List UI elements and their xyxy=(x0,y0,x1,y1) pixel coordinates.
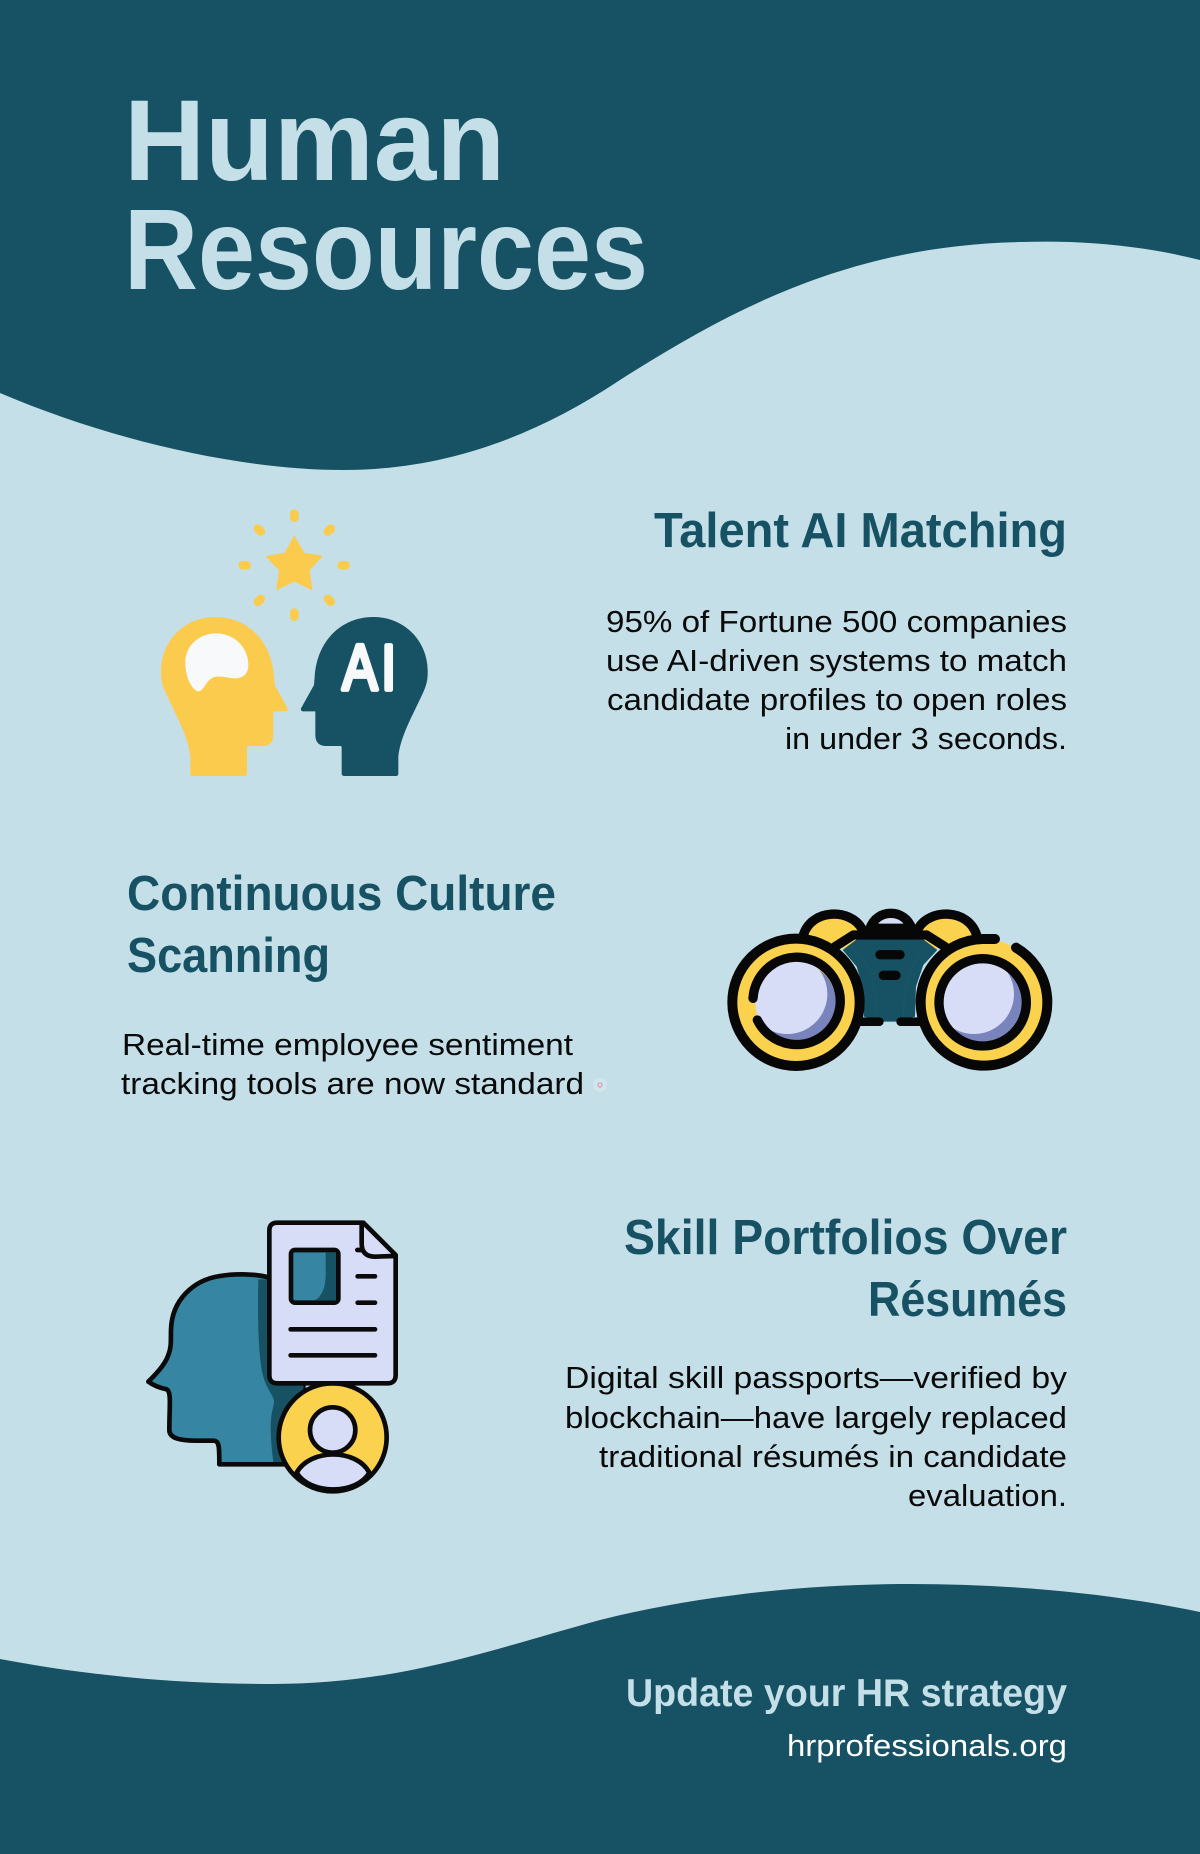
footer call to action xyxy=(626,1672,1067,1763)
text: skill portfolios body: blockchain—have largely replaced xyxy=(565,1400,1067,1435)
text: skill portfolios body: Digital skill passports—verified by xyxy=(565,1360,1068,1395)
heading: skill portfolios over resumes: Skill Portfolios Over xyxy=(624,1211,1067,1265)
heading: continuous culture scanning xyxy=(127,867,556,983)
text: talent AI matching body: in under 3 seconds. xyxy=(785,721,1067,756)
text: talent AI matching body: candidate profiles to open roles xyxy=(607,682,1067,717)
panel: continuous culture scanning xyxy=(121,867,1047,1101)
text: skill portfolios body xyxy=(565,1360,1068,1513)
text: culture scanning body: tracking tools are now standard xyxy=(121,1066,584,1101)
small pink dot xyxy=(593,1078,607,1092)
panel: skill portfolios over resumes xyxy=(148,1211,1068,1513)
text: talent AI matching body xyxy=(606,604,1067,756)
panel: talent AI matching xyxy=(161,504,1067,776)
text: talent AI matching body: 95% of Fortune 500 companies xyxy=(606,604,1067,639)
bottom wave banner xyxy=(0,1584,1200,1854)
heading: skill portfolios over resumes xyxy=(624,1211,1067,1327)
text: skill portfolios body: traditional résumés in candidate xyxy=(599,1439,1067,1474)
title xyxy=(124,77,648,314)
footer call to action: Update your HR strategy xyxy=(626,1672,1067,1715)
text: skill portfolios body: evaluation. xyxy=(908,1478,1067,1513)
top wave banner xyxy=(0,0,1200,470)
icon: binoculars xyxy=(732,913,1047,1066)
text: talent AI matching body: use AI-driven systems to match xyxy=(606,643,1067,678)
footer call to action: hrprofessionals.org xyxy=(787,1728,1067,1763)
title: Resources xyxy=(124,186,648,314)
text: culture scanning body: Real-time employee sentiment xyxy=(122,1027,573,1062)
icon: two heads with star: AI xyxy=(342,632,396,704)
icon: two heads with star xyxy=(161,509,428,776)
text: culture scanning body xyxy=(121,1027,584,1101)
icon: head with document and profile xyxy=(148,1223,396,1491)
heading: continuous culture scanning: Continuous Culture xyxy=(127,867,556,921)
heading: continuous culture scanning: Scanning xyxy=(127,929,330,983)
heading: skill portfolios over resumes: Résumés xyxy=(868,1273,1067,1327)
title: Human xyxy=(124,77,505,205)
heading: talent AI matching: Talent AI Matching xyxy=(654,504,1067,558)
